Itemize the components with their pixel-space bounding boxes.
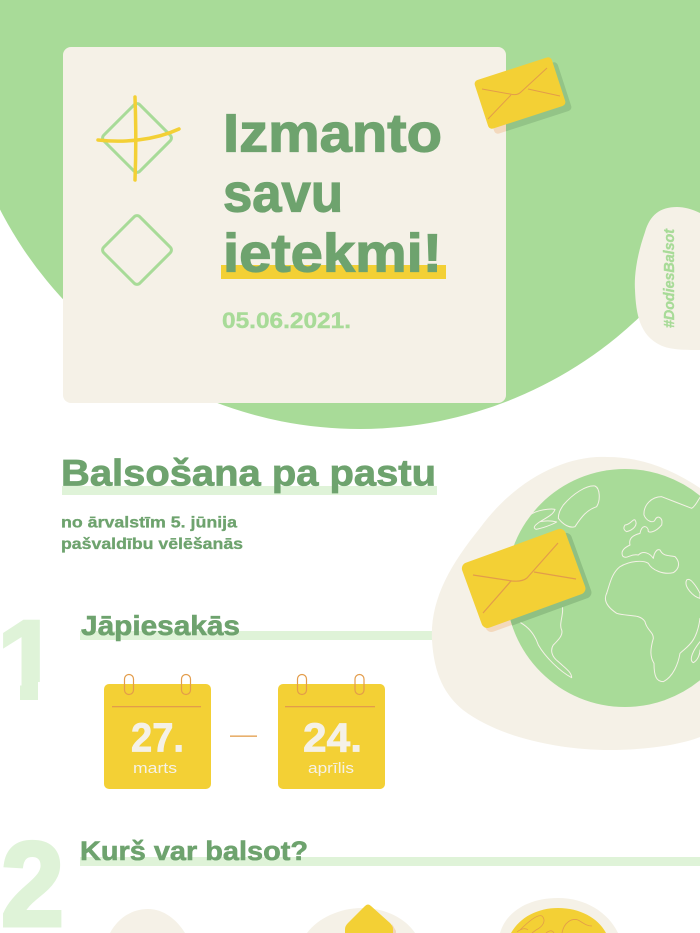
subtitle: pašvaldību vēlēšanās [61, 536, 243, 553]
title text [221, 104, 446, 284]
calendar: 24. aprīlis: 24. [303, 714, 362, 760]
icon: blob with yellow shape, cropped [307, 904, 415, 933]
background: green circle [0, 0, 700, 429]
calendar: 27. marts: 27. [131, 714, 184, 760]
hashtag tag [635, 207, 700, 350]
title text: ietekmi! [223, 224, 442, 284]
calendar: 24. aprīlis: aprīlis [308, 760, 354, 777]
section 1 heading: Jāpiesakās [81, 610, 240, 641]
illustration: globe with envelope [432, 457, 700, 750]
calendar: 27. marts: marts [133, 760, 177, 777]
dash between dates [230, 736, 257, 737]
title text: savu [223, 164, 343, 224]
section 2 heading: Kurš var balsot? [80, 836, 308, 866]
subtitle [61, 514, 243, 553]
continents [515, 486, 700, 682]
calendar: 24. aprīlis [278, 674, 385, 789]
hashtag tag: #DodiesBalsot [662, 228, 678, 328]
icon: empty ballot box [101, 214, 173, 286]
icon: small envelope [474, 56, 572, 135]
date: 05.06.2021. [222, 308, 351, 333]
icon: marked ballot box [98, 97, 179, 180]
subtitle: no ārvalstīm 5. jūnija [61, 514, 237, 532]
icon: large envelope [460, 527, 593, 634]
section 1 heading [80, 610, 440, 641]
calendar: 27. marts [104, 674, 211, 789]
section 2 heading [80, 836, 700, 866]
icon: blob person, cropped [110, 909, 185, 933]
panel: title card [63, 47, 506, 403]
icon: yellow globe, cropped [500, 898, 618, 933]
title text: Izmanto [223, 104, 442, 164]
heading: Balsošana pa pastu: Balsošana pa pastu [61, 452, 436, 494]
